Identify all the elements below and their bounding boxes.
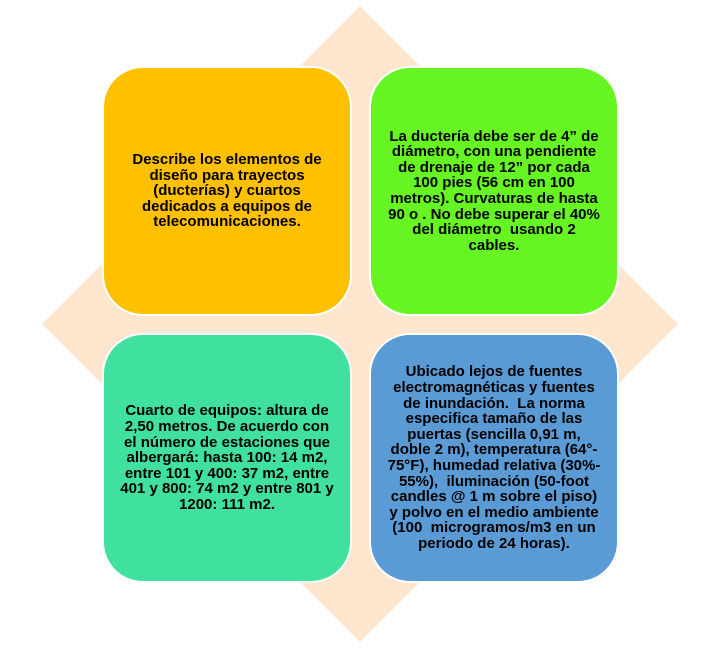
- text: duct specifications: diámetro, con una pendiente: [392, 143, 596, 160]
- text: location and environment: candles @ 1 m sobre el piso): [391, 488, 597, 505]
- text: description: [132, 151, 322, 230]
- text: description: diseño para trayectos: [149, 167, 305, 184]
- panel: top left description: [102, 66, 352, 316]
- text: equipment room sizes: entre 101 y 400: 37 m2, entre: [125, 465, 329, 482]
- panel: top right ducts: [369, 66, 619, 316]
- text: duct specifications: La ductería debe ser de 4” de: [389, 128, 599, 145]
- text: location and environment: Ubicado lejos de fuentes: [406, 363, 582, 380]
- text: location and environment: periodo de 24 horas).: [418, 535, 570, 552]
- text: location and environment: (100 microgramos/m3 en un: [392, 519, 596, 536]
- text: location and environment: especifica tamaño de las: [406, 410, 582, 427]
- text: location and environment: [388, 363, 600, 552]
- text: location and environment: de inundación. La norma: [403, 395, 585, 412]
- text: duct specifications: 90 o . No debe superar el 40%: [388, 206, 600, 223]
- text: location and environment: electromagnéticas y fuentes: [393, 379, 595, 396]
- text: location and environment: 55%), iluminación (50-foot: [399, 473, 589, 490]
- text: duct specifications: [388, 128, 600, 254]
- text: location and environment: puertas (sencilla 0,91 m,: [407, 426, 581, 443]
- text: description: Describe los elementos de: [132, 151, 322, 168]
- text: equipment room sizes: 401 y 800: 74 m2 y entre 801 y: [120, 480, 334, 497]
- panel: bottom right location: [369, 333, 619, 583]
- text: location and environment: y polvo en el medio ambiente: [389, 504, 599, 521]
- text: equipment room sizes: 1200: 111 m2.: [179, 496, 275, 513]
- text: duct specifications: 100 pies (56 cm en 100: [413, 174, 575, 191]
- text: equipment room sizes: el número de estaciones que: [124, 434, 330, 451]
- text: duct specifications: de drenaje de 12” por cada: [398, 159, 590, 176]
- text: duct specifications: cables.: [469, 237, 519, 254]
- text: description: dedicados a equipos de: [142, 198, 312, 215]
- text: location and environment: doble 2 m), temperatura (64°-: [391, 441, 597, 458]
- text: equipment room sizes: 2,50 metros. De acuerdo con: [125, 418, 329, 435]
- text: duct specifications: del diámetro usando 2: [412, 221, 576, 238]
- text: location and environment: 75°F), humedad relativa (30%-: [388, 457, 600, 474]
- text: description: (ducterías) y cuartos: [153, 182, 301, 199]
- text: equipment room sizes: [120, 402, 334, 513]
- text: equipment room sizes: Cuarto de equipos: altura de: [125, 402, 329, 419]
- panel: bottom left equipment room: [102, 333, 352, 583]
- text: equipment room sizes: albergará: hasta 100: 14 m2,: [127, 449, 327, 466]
- text: description: telecomunicaciones.: [153, 213, 301, 230]
- text: duct specifications: metros). Curvaturas de hasta: [390, 190, 598, 207]
